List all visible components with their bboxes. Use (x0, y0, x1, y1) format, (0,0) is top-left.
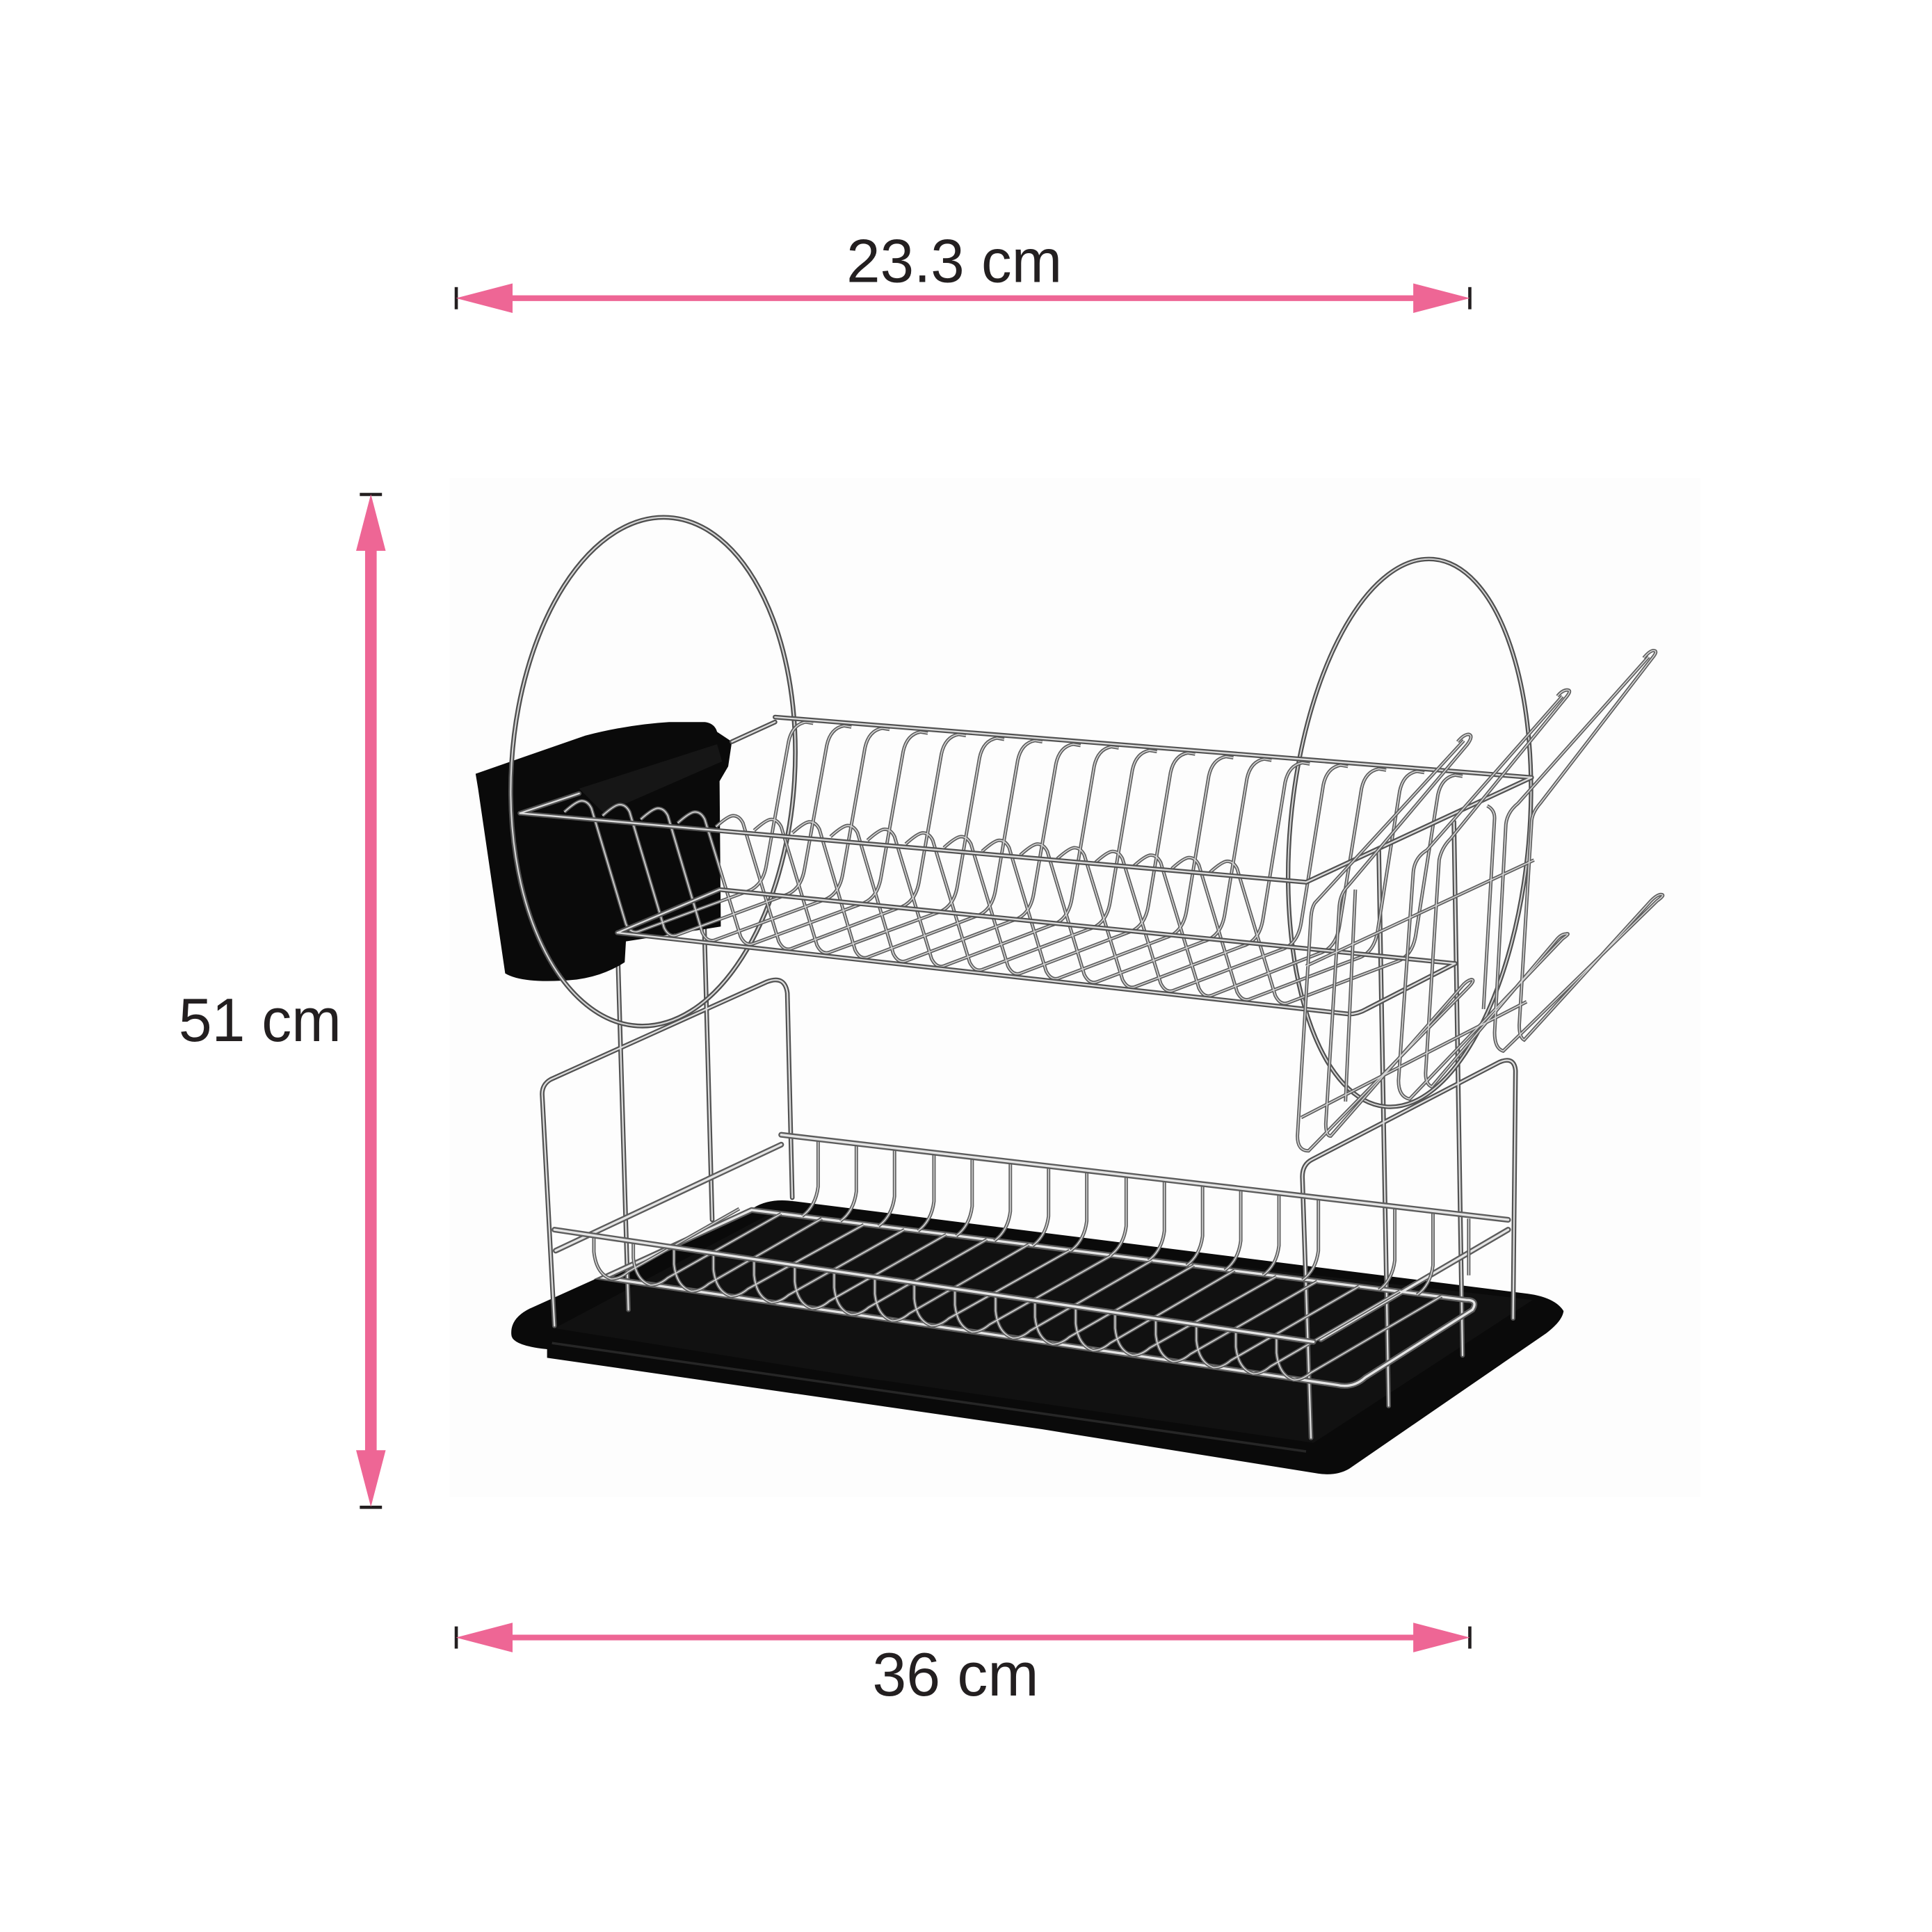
dimension: bottom width arrow 36 cm: 36 cm (872, 1640, 1039, 1709)
dimension: left height arrow 51 cm (179, 493, 386, 1509)
dimension: left height arrow 51 cm: 51 cm (179, 985, 341, 1054)
dish rack product illustration (476, 509, 1663, 1474)
drip tray (511, 1200, 1563, 1474)
lower rack wire frame (542, 807, 1515, 1438)
cutlery holder cup (476, 722, 732, 981)
photo background (450, 478, 1700, 1497)
dimension: top width arrow 23.3 cm (455, 227, 1472, 313)
right lid ring (1266, 549, 1552, 1117)
upper plate rack (520, 717, 1531, 1014)
side hairpin holders (1298, 650, 1663, 1151)
left lid ring (496, 509, 810, 1035)
dimension: top width arrow 23.3 cm: 23.3 cm (846, 227, 1062, 296)
dimension: bottom width arrow 36 cm (455, 1623, 1472, 1709)
